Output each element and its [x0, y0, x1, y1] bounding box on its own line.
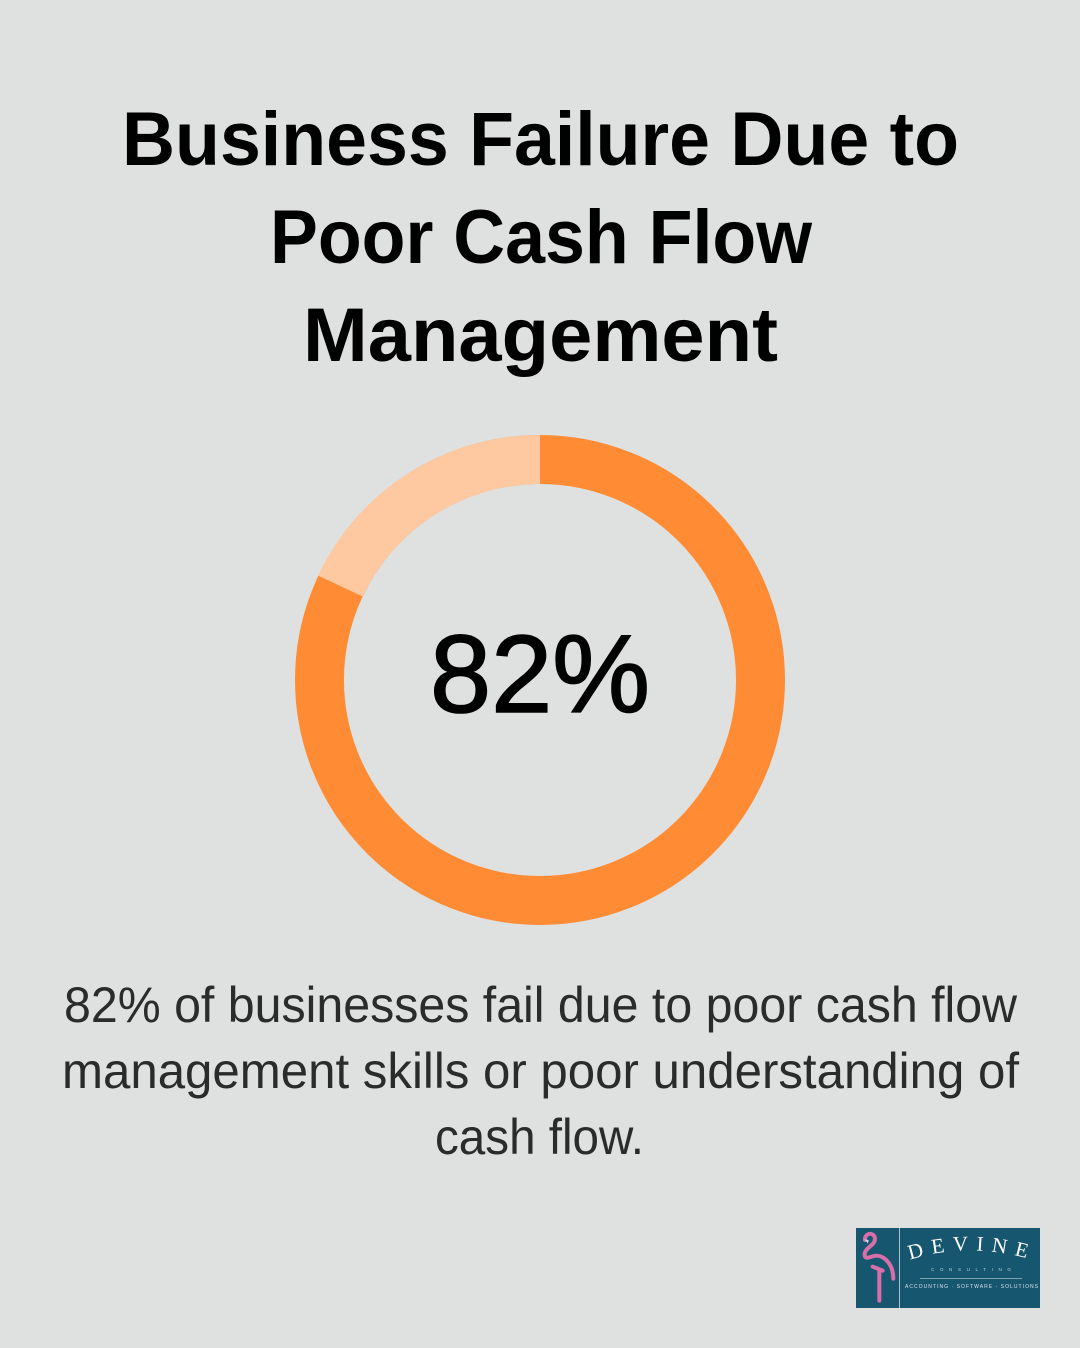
donut value: 82% — [430, 613, 650, 736]
icon: flamingo — [864, 1234, 893, 1301]
title: Poor Cash Flow — [270, 195, 813, 280]
logo name: DEVINE — [906, 1236, 1028, 1260]
description text: 82% of businesses fail due to poor cash flow — [64, 977, 1018, 1033]
title: Business Failure Due to — [122, 97, 959, 182]
logo subtitle: CONSULTING — [931, 1267, 1011, 1272]
title — [122, 97, 959, 378]
title: Management — [303, 293, 778, 378]
description text: cash flow. — [435, 1109, 644, 1165]
logo: Devine Consulting — [856, 1228, 1040, 1308]
description text — [62, 977, 1019, 1165]
description text: management skills or poor understanding of — [62, 1043, 1019, 1099]
donut chart: 82% — [320, 459, 760, 900]
logo tagline: ACCOUNTING · SOFTWARE · SOLUTIONS — [905, 1284, 1039, 1290]
remaining 18% segment — [340, 459, 540, 586]
